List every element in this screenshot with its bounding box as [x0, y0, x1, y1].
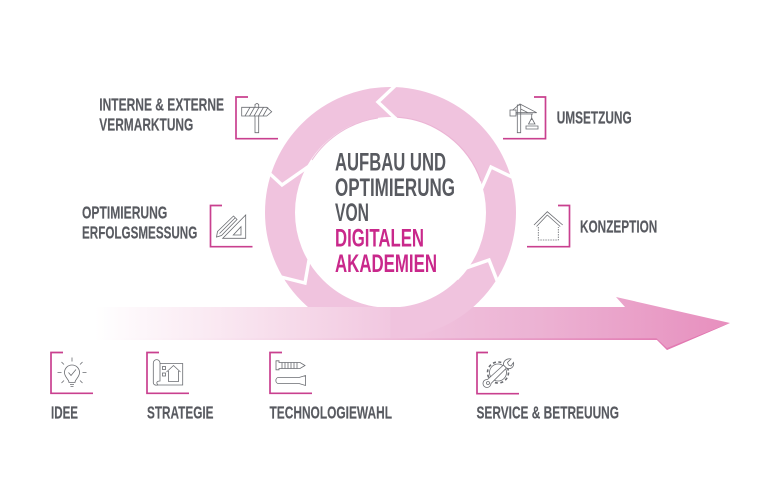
bracket: [477, 352, 519, 394]
label: konzeption: KONZEPTION: [580, 216, 657, 236]
circular cycle ring: [268, 84, 514, 323]
bracket: [236, 97, 278, 139]
label: service und betreuung: SERVICE & BETREUUNG: [476, 402, 619, 422]
timeline arrow: [95, 297, 730, 350]
central title: OPTIMIERUNG: [335, 174, 455, 202]
bracket: [147, 352, 189, 393]
label: interne und externe vermarktung: INTERNE & EXTERNE: [99, 95, 224, 115]
step: service und betreuung: [476, 352, 619, 422]
step: idee: [51, 352, 93, 422]
label: optimierung erfolgsmessung: ERFOLGSMESSUNG: [82, 223, 197, 243]
step: interne und externe vermarktung: [99, 95, 278, 139]
central title: AUFBAU UND: [335, 148, 446, 176]
icon: blueprint: [153, 360, 183, 385]
label: strategie: STRATEGIE: [147, 402, 214, 422]
bracket: [51, 352, 93, 393]
step: umsetzung: [503, 97, 632, 139]
icon: house outline: [534, 212, 563, 240]
icon: set square and pencil: [216, 215, 246, 238]
step: konzeption: [527, 206, 657, 247]
step: strategie: [147, 352, 214, 422]
label: umsetzung: UMSETZUNG: [557, 107, 632, 127]
icon: wrench and gear: [483, 359, 514, 387]
icon: signpost: [242, 103, 272, 133]
icon: crane: [510, 104, 538, 133]
label: optimierung erfolgsmessung: OPTIMIERUNG: [82, 203, 167, 223]
step: optimierung erfolgsmessung: [82, 203, 252, 247]
step: technologiewahl: [270, 352, 392, 422]
label: optimierung erfolgsmessung: [82, 203, 197, 243]
bracket: [503, 97, 546, 139]
label: technologiewahl: TECHNOLOGIEWAHL: [270, 402, 392, 422]
ring segment overlapping arrow: [390, 280, 479, 338]
label: idee: IDEE: [51, 402, 78, 422]
icon: light bulb with check: [58, 358, 86, 386]
bracket: [210, 206, 252, 247]
central title: VON: [335, 199, 369, 227]
central title: [335, 148, 455, 278]
central title: DIGITALEN: [335, 224, 424, 252]
label: interne und externe vermarktung: [99, 95, 224, 135]
bracket: [527, 206, 570, 247]
bracket: [270, 352, 312, 393]
label: interne und externe vermarktung: VERMARKTUNG: [99, 115, 193, 135]
central title: AKADEMIEN: [335, 250, 437, 278]
icon: screws: [276, 361, 306, 386]
